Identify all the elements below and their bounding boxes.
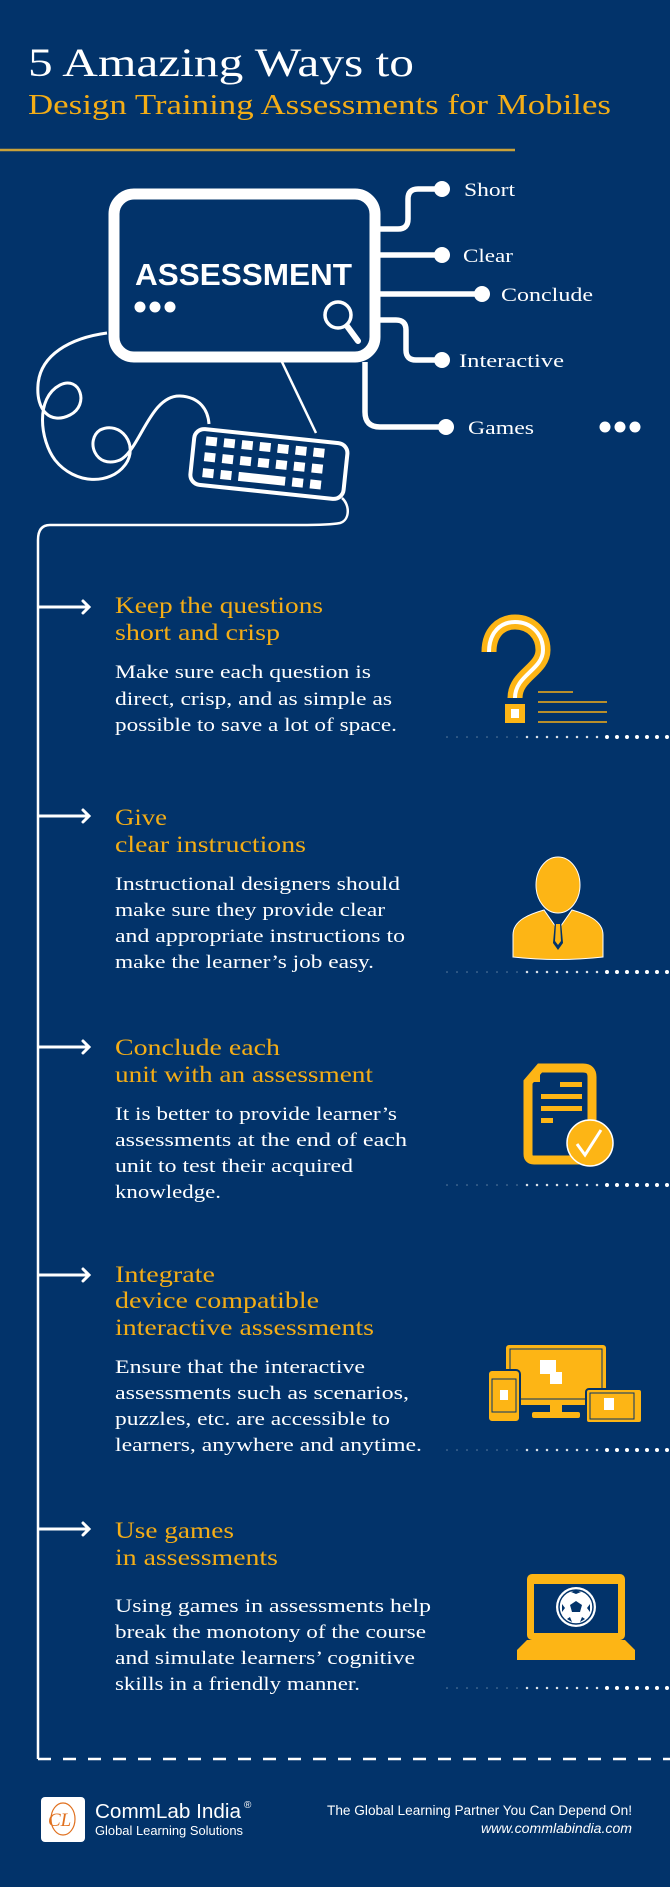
dotted divider — [447, 736, 670, 738]
section 2: clear instructions: and appropriate instructions to — [115, 926, 405, 947]
section 2: clear instructions: Give — [115, 805, 167, 830]
footer logo: ® — [244, 1800, 252, 1811]
arrow — [38, 810, 89, 822]
section 2: clear instructions: clear instructions — [115, 832, 306, 857]
branch labels: Games — [468, 418, 534, 439]
icon: question mark — [489, 622, 607, 723]
branch labels: Conclude — [501, 285, 593, 306]
section 1: keep questions short — [38, 593, 670, 737]
footer logo: CL — [48, 1810, 71, 1831]
section 1: keep questions short: possible to save a lot of space. — [115, 715, 397, 736]
arrow — [38, 1041, 89, 1053]
section 5: use games: break the monotony of the course — [115, 1622, 426, 1643]
footer tagline: www.commlabindia.com — [481, 1821, 632, 1836]
branch labels — [459, 180, 593, 439]
branch labels: Short — [464, 180, 516, 201]
section 2: clear instructions — [38, 805, 670, 973]
section 1: keep questions short: direct, crisp, and as simple as — [115, 689, 392, 710]
section 4: device compatible: Ensure that the interactive — [115, 1357, 365, 1378]
section 3: conclude with assessment: unit to test their acquired — [115, 1156, 354, 1177]
section 5: use games — [38, 1518, 670, 1695]
keyboard — [189, 428, 348, 500]
title: 5 Amazing Ways to — [28, 40, 414, 85]
footer tagline: The Global Learning Partner You Can Depend On! — [327, 1803, 632, 1818]
section 1: keep questions short: short and crisp — [115, 620, 280, 645]
section 2: clear instructions: make sure they provide clear — [115, 900, 386, 921]
footer tagline — [327, 1803, 632, 1836]
dotted divider — [447, 1184, 670, 1186]
section 3: conclude with assessment: It is better to provide learner’s — [115, 1104, 397, 1125]
section 4: device compatible: interactive assessments — [115, 1315, 374, 1340]
section 4: device compatible — [38, 1262, 670, 1456]
dotted divider — [447, 971, 670, 973]
section 3: conclude with assessment — [38, 1035, 670, 1203]
section 1: keep questions short: Keep the questions — [115, 593, 323, 618]
section 3: conclude with assessment: knowledge. — [115, 1182, 221, 1203]
illustration: assessment monitor with branches — [38, 180, 640, 1759]
section 5: use games: and simulate learners’ cognitive — [115, 1648, 415, 1669]
section 4: device compatible: puzzles, etc. are accessible to — [115, 1409, 390, 1430]
section 4: device compatible: assessments such as scenarios, — [115, 1383, 409, 1404]
branch labels: Interactive — [459, 351, 564, 372]
section 5: use games: Use games — [115, 1518, 234, 1543]
section 5: use games: skills in a friendly manner. — [115, 1674, 360, 1695]
section 5: use games: in assessments — [115, 1545, 278, 1570]
arrow — [38, 601, 89, 613]
section 3: conclude with assessment: unit with an assessment — [115, 1062, 374, 1087]
icon: person — [513, 857, 603, 960]
section 4: device compatible: learners, anywhere and anytime. — [115, 1435, 422, 1456]
icon: devices — [488, 1345, 642, 1423]
section 3: conclude with assessment: assessments at the end of each — [115, 1130, 408, 1151]
icon: magnifier — [325, 302, 358, 341]
section 1: keep questions short: Make sure each question is — [115, 662, 371, 683]
cables — [38, 333, 209, 479]
branches — [365, 189, 482, 427]
dotted divider — [447, 1449, 670, 1451]
branch labels: Clear — [463, 246, 514, 267]
arrow — [38, 1523, 89, 1535]
section 2: clear instructions: make the learner’s job easy. — [115, 952, 374, 973]
footer logo: CommLab India — [95, 1801, 242, 1823]
dashed bottom line — [38, 1758, 670, 1760]
monitor — [114, 194, 375, 357]
section 4: device compatible: device compatible — [115, 1288, 319, 1313]
footer logo — [41, 1797, 252, 1842]
title — [28, 40, 611, 121]
dotted divider — [447, 1687, 670, 1689]
section 4: device compatible: Integrate — [115, 1262, 215, 1287]
footer logo: Global Learning Solutions — [95, 1823, 243, 1838]
icon: laptop with ball — [517, 1574, 635, 1660]
section 3: conclude with assessment: Conclude each — [115, 1035, 281, 1060]
section 2: clear instructions: Instructional designers should — [115, 874, 401, 895]
stand line — [282, 362, 316, 433]
section 5: use games: Using games in assessments help — [115, 1596, 431, 1617]
monitor: ASSESSMENT — [135, 257, 352, 292]
title: Design Training Assessments for Mobiles — [28, 89, 611, 121]
icon: document with check — [528, 1068, 613, 1166]
arrow — [38, 1269, 89, 1281]
